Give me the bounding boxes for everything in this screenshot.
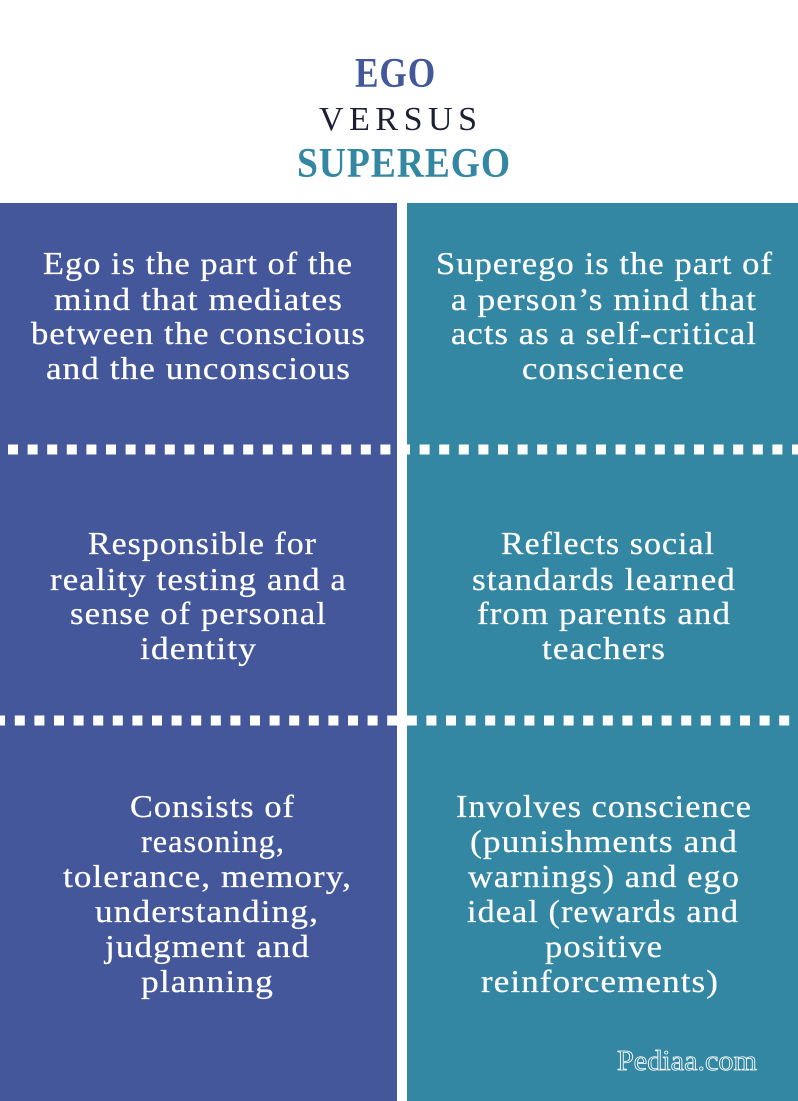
text block: superego role: Reflects social [501,525,715,561]
panel: ego column [0,203,397,1101]
text block: superego definition: acts as a self-critical [451,315,757,351]
dotted divider: lower [0,716,789,726]
heading: EGO: EGO [355,51,436,97]
text block: ego definition [31,245,366,386]
text block: superego definition [436,245,773,386]
text block: superego role: standards learned [472,561,736,597]
panel: superego column [407,203,798,1101]
text block: ego components: tolerance, memory, [63,858,352,894]
text block: superego role [472,525,736,666]
title [297,51,511,187]
logo: Pediaa.com: Pediaa.com [617,1046,757,1077]
text block: superego definition: a person’s mind that [451,281,757,317]
text block: ego role: sense of personal [70,595,327,631]
text block: ego definition: Ego is the part of the [43,245,353,281]
text block: superego components: positive [545,928,663,964]
text block: superego components: reinforcements) [481,963,719,999]
text block: ego definition: between the conscious [31,315,366,351]
text block: ego components: reasoning, [141,823,285,859]
text block: ego components: judgment and [104,928,310,964]
text block: ego components: planning [141,963,274,999]
text block: ego components: Consists of [130,788,295,824]
text block: ego components: understanding, [95,893,319,929]
text block: ego role: Responsible for [88,525,317,561]
text block: ego role: identity [140,630,257,666]
text block: superego definition: conscience [522,350,685,386]
text block: superego components: (punishments and [470,823,738,859]
text block: superego role: from parents and [477,595,731,631]
text block: superego definition: Superego is the part of [436,245,773,281]
text block: superego role: teachers [542,630,666,666]
text block: ego components [63,788,352,999]
dotted divider: upper [8,444,798,454]
text block: superego components [456,788,752,999]
text block: ego role [50,525,347,666]
text block: superego components: ideal (rewards and [467,893,739,929]
text block: ego definition: mind that mediates [54,281,343,317]
text block: superego components: Involves conscience [456,788,752,824]
text block: ego definition: and the unconscious [46,350,351,386]
text block: superego components: warnings) and ego [468,858,740,894]
heading: VERSUS: VERSUS [319,101,477,138]
heading: SUPEREGO: SUPEREGO [297,141,511,187]
text block: ego role: reality testing and a [50,561,347,597]
